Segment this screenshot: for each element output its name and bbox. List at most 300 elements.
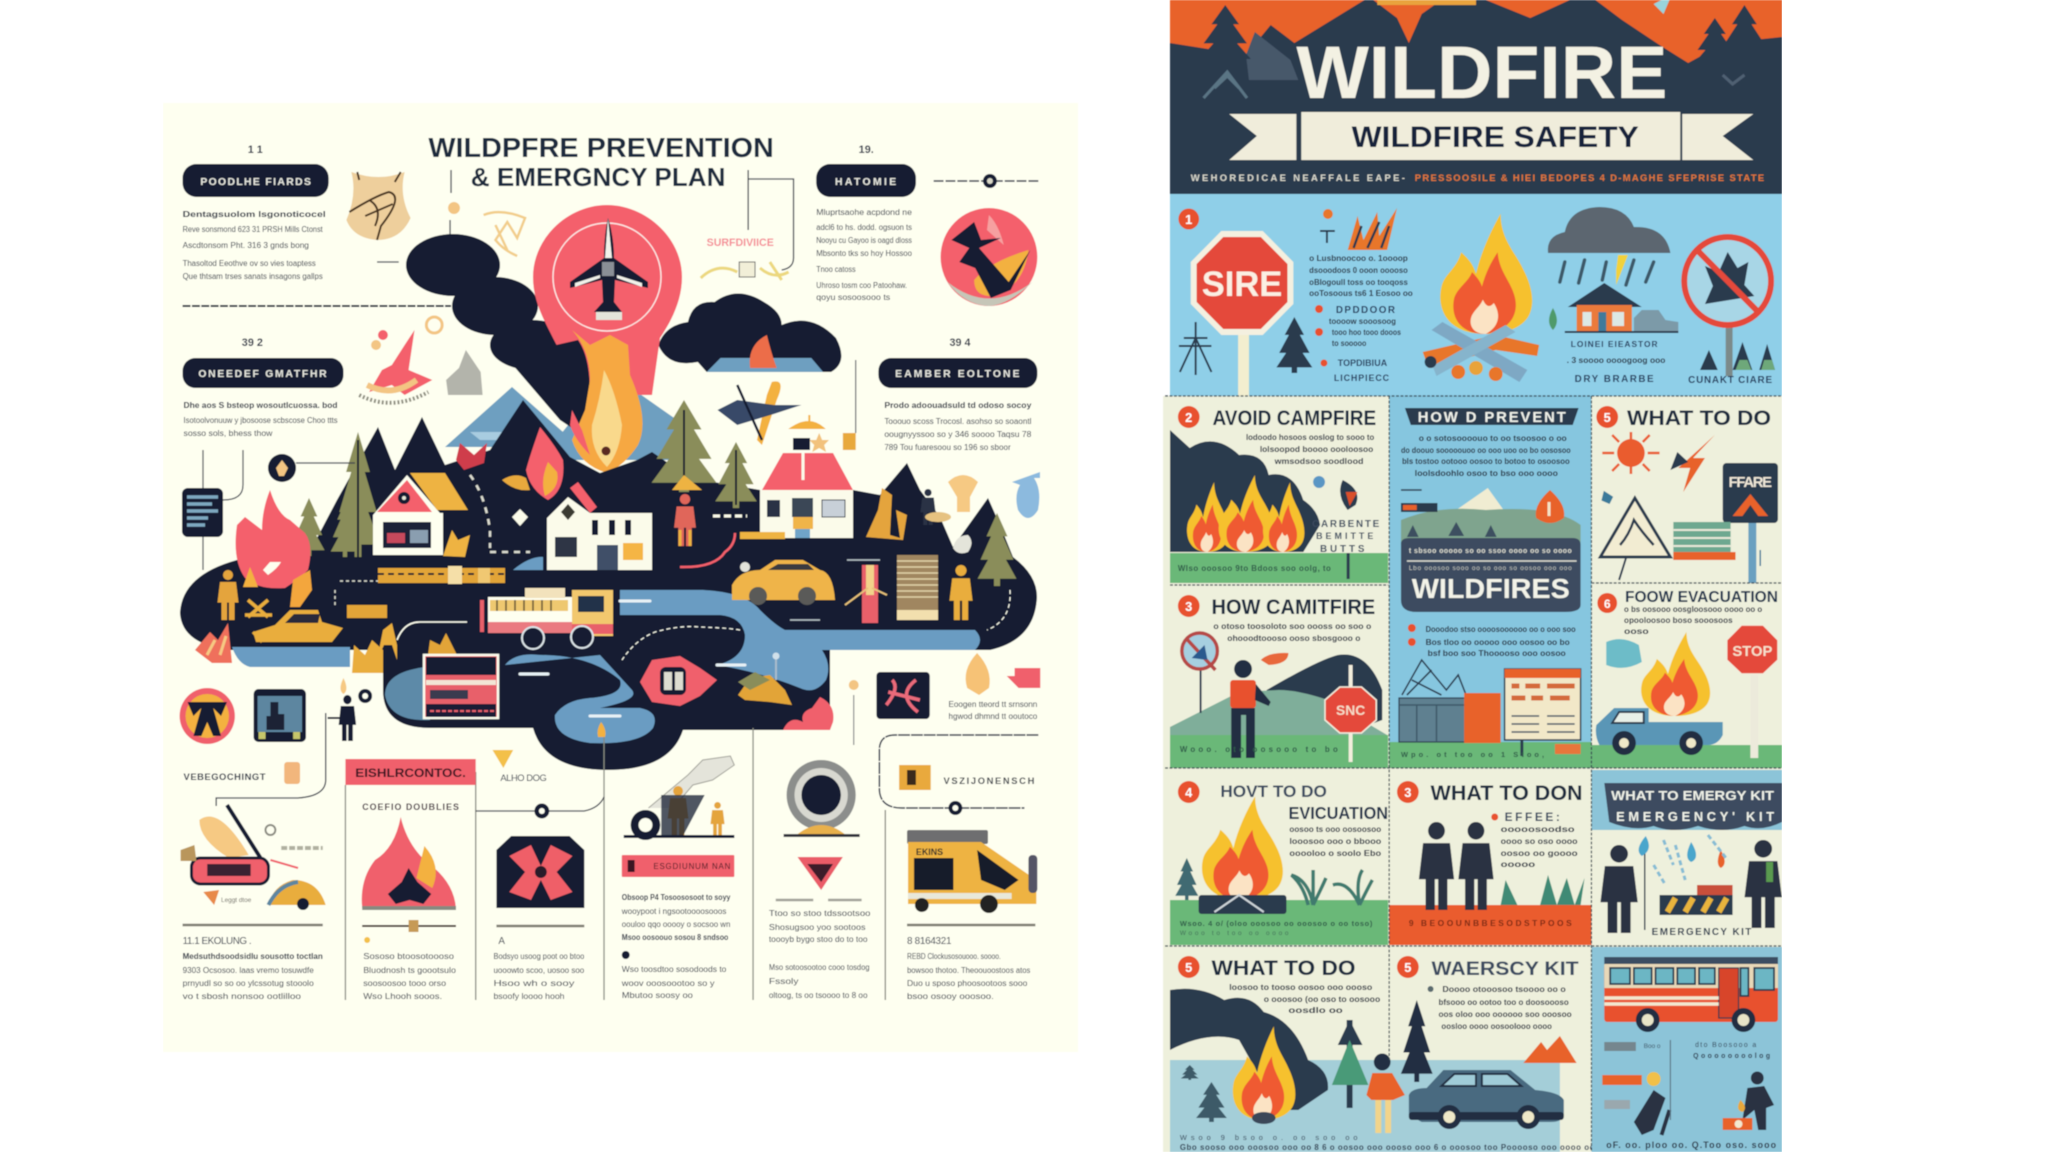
grid dividers	[1165, 396, 1782, 1152]
section number labels: 39 2	[242, 337, 263, 349]
badge	[1596, 406, 1618, 428]
icon: dark smoke plume	[406, 234, 598, 440]
bottom text column 5: Fssoly	[769, 977, 798, 986]
figure pink	[845, 565, 887, 623]
bottom text column 4: Obsoop P4 Tosoososoot to soyy	[622, 893, 731, 902]
text lines: bls tostoo ootooo oosoo to botoo to osoosoo	[1402, 457, 1570, 466]
text block: top right: Mbsonto tks so hoy Hossoo	[816, 249, 913, 258]
lower blue wash	[1170, 1060, 1560, 1152]
text lines: oosoo ts ooo oosoosoo	[1289, 825, 1381, 834]
pill heading: top right	[816, 164, 916, 197]
fire warning sign: FFARE	[1729, 475, 1772, 491]
mountain and hills	[1401, 488, 1581, 545]
caption: BEMITTE	[1316, 531, 1373, 541]
title: WILDPFRE PREVENTION	[428, 132, 774, 163]
text lines	[1501, 825, 1578, 869]
section what to do top right	[1596, 406, 1778, 583]
badge	[1178, 781, 1200, 803]
cream base for lower rows	[1163, 396, 1782, 1152]
icon: dark storm cloud with fire	[658, 294, 841, 372]
dotted white trail	[335, 581, 378, 605]
text lines: loosoo to tooso oosoo ooo oooso	[1229, 983, 1372, 992]
prohibition sign	[1684, 237, 1775, 386]
orange spark	[1261, 653, 1288, 665]
connector with node	[934, 174, 1038, 188]
blue blob	[1606, 639, 1642, 668]
smoke	[1170, 989, 1328, 1110]
people and supplies near right house	[866, 488, 951, 540]
bulleted list 1: toooow sooosoog	[1329, 317, 1396, 326]
label with icon	[184, 762, 300, 784]
barrier kit box	[1660, 885, 1733, 915]
small icons	[1313, 476, 1358, 510]
doc icon and nodes	[182, 450, 355, 570]
power pylon	[1179, 322, 1211, 375]
smoke	[1170, 430, 1320, 552]
text lines	[1246, 433, 1374, 466]
header band	[1170, 0, 1782, 194]
ground text: Wpo. ot too oo 1 Stoo,	[1401, 750, 1544, 759]
text lines: lodoodo hosoos ooslog to sooo to	[1246, 433, 1374, 442]
person with marker	[328, 678, 372, 741]
text lines	[1428, 985, 1572, 1031]
middle blue column background	[1389, 396, 1591, 768]
bottom text: oF. oo. ploo oo. Q.Too oso. sooo	[1606, 1140, 1777, 1150]
icon: explosion debris	[359, 317, 442, 403]
tool icon left	[245, 600, 272, 617]
heading: FOOW EVACUATION	[1625, 589, 1778, 606]
house: red roof right	[740, 438, 853, 539]
text lines: ooso	[1624, 627, 1649, 636]
text block: middle left: Isotoolvonuuw y jbosoose scbscose Choo ttts	[184, 416, 338, 425]
text block 1	[1309, 254, 1413, 298]
striped stack	[1673, 522, 1736, 560]
upper poster content	[183, 132, 1038, 452]
bottom text column 3: A	[498, 936, 505, 947]
flame	[1641, 632, 1710, 716]
text block 1: dsooodoos 0 ooon ooooso	[1309, 266, 1408, 275]
text lines: opooloosoo boso sooosoos	[1624, 616, 1733, 625]
section emergency kit with car	[1180, 956, 1595, 1152]
title: & EMERGNCY PLAN	[471, 164, 725, 192]
text lines: oooo so oso oooo	[1501, 837, 1578, 846]
text lines: ooooloo o soolo Ebo	[1289, 849, 1381, 858]
icon: plane badge and flame trail	[533, 205, 682, 473]
house: white centre house	[543, 478, 655, 570]
text lines: o otoso toosoloto soo oooss oo soo o	[1213, 622, 1372, 631]
text lines: loolsdoohlo osoo to bso ooo oooo	[1415, 469, 1558, 478]
bar and yellow marker	[362, 920, 456, 943]
badge: 5	[1185, 960, 1192, 975]
ground	[1591, 745, 1782, 768]
text lines: bfsooo oo ootoo too o doosoooso	[1438, 998, 1569, 1007]
section fire bus and steps	[1591, 947, 1782, 1152]
text block 1: ooTosoous ts6 1 Eosoo oo	[1309, 289, 1413, 298]
green strip text: Wsoo. 4 o/ (oloo ooosoo oo ooosoo o oo toso)	[1180, 919, 1373, 928]
panel: wildfire prevention and emergency plan poster	[163, 103, 1078, 1052]
bulleted list 1: TOPDIBIUA	[1338, 358, 1388, 368]
text block: middle right: 789 Tou fuaresoou so 196 so sboor	[884, 443, 1011, 452]
fire bus	[1604, 957, 1778, 1032]
wildfires banner	[1401, 538, 1581, 612]
green ground	[1170, 735, 1388, 768]
pill heading: middle left: ONEEDEF GMATFHR	[198, 369, 327, 380]
phone icon	[254, 689, 306, 742]
bottom text column 5	[769, 909, 871, 1000]
bottom text column 6: bowsoo thotoo. Theoouoostoos atos	[907, 966, 1030, 975]
header title: WILDFIRE	[1296, 31, 1667, 114]
bottom caption lines: Wsoo 9 bsoo o. oo soo oo	[1180, 1133, 1358, 1142]
person in orange on the path	[674, 494, 696, 546]
icon: delivery truck: EKINS	[916, 847, 943, 857]
bulleted list 1: to sooooo	[1332, 339, 1367, 348]
dashes across land	[713, 514, 747, 518]
bottom text column 2: Wso Lhooh sooos.	[363, 992, 442, 1001]
icon: red flame	[362, 817, 456, 910]
bulleted list 1	[1315, 305, 1401, 383]
heading	[1220, 782, 1388, 823]
bottom text column 5: Ttoo so stoo tdssootsoo	[769, 909, 871, 918]
heading: WHAT TO DON	[1431, 782, 1583, 805]
yellow figure and crown near stream	[352, 623, 457, 673]
badge: 3	[1185, 599, 1192, 614]
section what to do with two people	[1389, 781, 1591, 945]
bottom text column 5: Mso sotoosootoo cooo tosdog	[769, 963, 870, 972]
icon: burnt tree roundel	[941, 208, 1037, 306]
river highlights	[520, 601, 745, 716]
bottom text column 1: prnyudl so so oo ylcssotug stooolo	[183, 979, 314, 988]
icon: blue mountains	[445, 373, 690, 460]
icon: extinguisher scene: Leggt dtoe	[221, 897, 252, 904]
bottom text column 4: oouloo qqo ooooy o socsoo wn	[622, 920, 730, 929]
right steps: Qoooooooolog	[1693, 1053, 1770, 1060]
section number labels: 19.	[859, 144, 874, 156]
title	[428, 132, 774, 192]
text lines: o bs oosooo oosgloosooo oooo oo o	[1624, 605, 1762, 614]
bottom text column 5: Shosugsoo yoo sootoos	[769, 923, 866, 932]
pickup truck	[1596, 708, 1723, 755]
bottom text column 3: uooowto scoo, uosoo soo	[493, 966, 585, 975]
heading: HOW CAMITFIRE	[1211, 596, 1375, 619]
stop sign: SIRE	[1202, 266, 1282, 304]
bottom text column 4	[621, 893, 731, 1000]
cloud banner: EMERGENCY' KIT	[1616, 809, 1774, 824]
text block: top right	[816, 208, 913, 302]
bottom text column 6: REBD Clockusosouooo. soooo.	[907, 952, 1001, 961]
icon: folded map	[346, 172, 411, 240]
green strip text: Wlso ooosoo 9to Bdoos soo oolg, to	[1178, 564, 1331, 573]
caption	[1312, 519, 1380, 555]
car yellow left	[253, 610, 343, 642]
icon: yellow scribble with book	[701, 262, 789, 280]
red label	[1401, 490, 1437, 512]
pill heading: middle right: EAMBER EOLTONE	[895, 369, 1020, 380]
right steps: dto Boosooo a	[1695, 1042, 1756, 1049]
text block: top right: Mluprtsaohe acpdond ne	[816, 208, 913, 217]
text lines	[1624, 605, 1762, 636]
text lines: wmsodsoo soodlood	[1274, 457, 1364, 466]
pink flame in land corner	[783, 697, 833, 730]
text block: middle right: Prodo adoouadsuld td odoso socoy	[884, 401, 1032, 410]
section follow evacuation	[1591, 589, 1782, 768]
bottom text column 1: vo t sbosh nonsoo ootlilloo	[183, 992, 302, 1001]
icon: dark octagon with red cross	[496, 836, 584, 908]
bottom text column 2: soosoosoo tooo orso	[363, 979, 447, 988]
bottom text column 3	[493, 936, 585, 1001]
text block: top left: Thasoltod Eeothve ov so vies toaptess	[183, 259, 316, 268]
bullets: Bos tloo oo ooooo ooo oosoo oo bo	[1426, 638, 1570, 647]
text block: top right: Tnoo catoss	[816, 265, 856, 274]
badge: 2	[1185, 410, 1192, 425]
text lines	[1289, 825, 1381, 858]
section 3 how campfire	[1170, 595, 1388, 768]
badge: 5	[1604, 410, 1611, 425]
signpost	[1347, 553, 1350, 579]
house with car	[1549, 283, 1678, 332]
ribbon banner: WILDFIRE SAFETY	[1352, 121, 1639, 154]
wildfires banner: Lbo ooosoo sooo oo so ooo so oosoo ooo ooo	[1409, 565, 1572, 572]
caption right: Eoogen tteord tt srnsonn	[948, 700, 1037, 709]
bottom text column 3: bsoofy loooo hooh	[493, 992, 565, 1001]
bottom text column 5: toooyb bygo stoo do to too	[769, 935, 868, 944]
icon: extinguisher scene	[181, 805, 326, 910]
caption: EMERGENCY KIT	[1652, 927, 1751, 938]
cloud banner	[1604, 783, 1782, 830]
icon: dark square with pink	[876, 672, 930, 719]
fire warning sign	[1723, 463, 1778, 583]
warning roundel	[180, 688, 235, 744]
yellow figure and palm	[738, 652, 792, 705]
blue background	[1591, 947, 1782, 1152]
red label 2	[622, 855, 734, 877]
text block: middle left: sosso sols, bhess thow	[184, 429, 273, 438]
text block: top left: Ascdtonsom Pht. 316 3 gnds bong	[183, 241, 309, 250]
bottom text column 4: Wso toosdtoo sosodoods to	[622, 965, 727, 974]
column dividers	[345, 728, 885, 1000]
three flames	[1187, 475, 1304, 552]
bottom text column 2	[363, 952, 457, 1001]
building strip	[378, 566, 505, 584]
text lines	[1213, 622, 1372, 643]
header trees	[1200, 5, 1768, 98]
section what to do bottom left	[1170, 956, 1560, 1152]
icon: delivery truck	[907, 830, 1037, 913]
people	[1600, 838, 1782, 933]
bulleted list 1: tooo hoo tooo dooos	[1332, 328, 1401, 337]
section number labels	[242, 144, 971, 349]
text lines: oos oloo ooo oooooo soo ooosoo	[1438, 1010, 1572, 1019]
text block: top left: Dentagsuolom lsgonoticocel	[183, 210, 326, 219]
river channel	[620, 590, 980, 690]
trees	[293, 400, 1016, 586]
pink curve	[680, 533, 735, 567]
river pool	[505, 654, 655, 743]
pill heading: top left	[183, 164, 329, 197]
subheading: COEFIO DOUBLIES	[362, 802, 459, 812]
text block: top right: Nooyu cu Gayoo is oagd dloss	[816, 236, 912, 245]
connector with orange box	[809, 360, 856, 452]
card icon inside land	[424, 655, 498, 718]
bottom text column 1: Medsuthdsoodsidlu sousotto toctlan	[183, 952, 323, 961]
flame	[1233, 1026, 1295, 1124]
bottom text column 5: oltoog, ts oo tsoooo to 8 oo	[769, 991, 868, 1000]
blue stream strip left	[232, 647, 350, 667]
text lines: oosdlo oo	[1288, 1006, 1343, 1015]
stop sign	[1727, 625, 1778, 758]
text lines: oosoo oo goooo	[1501, 849, 1578, 858]
text lines: lolsoopod boooo oooloosoo	[1260, 445, 1373, 454]
two people	[1419, 822, 1494, 910]
caption right: hgwod dhmnd tt ooutoco	[948, 712, 1038, 721]
green ground	[1170, 553, 1388, 583]
text lines: o o sotosoooouo to oo tsoosoo o oo	[1419, 434, 1567, 443]
thin white marks	[790, 560, 880, 620]
left steps with labels: Boo o	[1644, 1043, 1661, 1050]
small blue marks	[1602, 492, 1760, 566]
text block: middle right	[884, 401, 1032, 452]
badge	[1397, 781, 1419, 803]
stop sign	[1191, 231, 1293, 396]
heading: AVOID CAMPFIRE	[1212, 407, 1376, 430]
icon: flames near the ridge	[456, 427, 563, 500]
text block: top right: qoyu sosoosooo ts	[816, 293, 890, 302]
text block 1: o Lusbnoocoo o. 1oooop	[1309, 254, 1408, 263]
sub label: EFFEE:	[1505, 810, 1560, 824]
stop sign small	[1325, 665, 1376, 762]
yellow marker stem	[849, 680, 859, 745]
section number labels: 39 4	[949, 337, 971, 349]
sun	[1602, 432, 1660, 474]
tree	[1332, 1020, 1368, 1108]
fire truck	[480, 588, 613, 649]
section 1 causes panel	[1170, 194, 1782, 396]
badge	[1597, 593, 1617, 613]
dark forest and land silhouette	[180, 400, 1037, 770]
river side pool	[385, 667, 430, 720]
icon: gauge badge	[784, 760, 860, 837]
diamond and dashes	[470, 475, 530, 552]
text lines	[1229, 983, 1380, 1015]
text lines: o ooosoo (oo oso to oosooo	[1264, 995, 1380, 1004]
bottom text column 4: wooypoot i ngsootoooosooos	[621, 907, 726, 916]
panel: wildfire safety poster	[1163, 0, 1782, 1152]
icon: machine with worker	[624, 756, 734, 840]
orange strip text: 9 BEOOUNBBESODSTPOOS	[1409, 918, 1572, 928]
figure yellow left	[218, 570, 238, 620]
buildings and billboard	[1399, 660, 1581, 756]
section emergency kit	[1591, 770, 1782, 938]
icon: red mug	[1007, 668, 1040, 688]
connector curve	[216, 713, 326, 806]
green strip text	[1180, 919, 1373, 937]
icon: yellow vest	[948, 475, 978, 512]
hill green	[1170, 690, 1387, 768]
bottom caption lines: Gbo sooso ooo ooosoo ooo oo 8 6 o oosoo ooo oooso ooo 6 o ooosoo too Pooooso ooo oooo oo	[1180, 1143, 1595, 1152]
yellow marker drop	[598, 722, 606, 737]
icon: shield triangle	[797, 857, 843, 890]
bottom text column 6: bsoo osooy ooosoo.	[907, 992, 994, 1001]
header strapline	[1191, 172, 1764, 183]
stop sign small: SNC	[1336, 702, 1365, 718]
text block: top left: Que thtsam trses sanats insagons gallps	[183, 272, 323, 281]
car yellow right	[732, 560, 835, 605]
stop sign: STOP	[1732, 644, 1772, 660]
bottom text column 4: woov ooosoootoo so y	[621, 979, 715, 988]
plants	[1175, 858, 1372, 905]
text block: top left: Reve sonsmond 623 31 PRSH Mills Ctonst	[183, 225, 323, 234]
connector with node middle	[476, 797, 604, 818]
campfire flame and logs	[1423, 214, 1539, 382]
header strapline: WEHOREDICAE NEAFFALE EAPE-	[1191, 172, 1405, 183]
wildfires banner: WILDFIRES	[1412, 573, 1570, 604]
bullets: bsf boo soo Thooooso ooo oosoo	[1428, 649, 1566, 658]
bottom text column 2: Sososo btoosotoooso	[363, 952, 455, 961]
bulleted list 1: LICHPIECC	[1334, 373, 1390, 383]
text lines: looosoo ooo o bbooo	[1289, 837, 1381, 846]
icon: yellow spark scribble	[484, 212, 525, 256]
text block: middle right: oougnyyssoo so y 346 soooo Taqsu 78	[884, 430, 1032, 439]
section 2 avoid campfire	[1170, 406, 1388, 583]
warning triangle	[1600, 498, 1670, 580]
bottom text column 6: 8 8164321	[907, 936, 952, 947]
left steps with labels	[1602, 1042, 1669, 1135]
caption: CARBENTE	[1312, 519, 1380, 530]
caption block	[1567, 339, 1666, 385]
icon: large pink fire on the left	[236, 490, 312, 607]
heading: WHAT TO DO	[1211, 957, 1356, 980]
badge	[1178, 406, 1200, 428]
person	[1230, 660, 1271, 758]
icon: small plane and tools	[718, 381, 823, 445]
icon: blue jar	[1012, 472, 1040, 518]
flame and log	[1199, 796, 1286, 914]
ribbon banner	[1229, 112, 1753, 160]
person	[1366, 1054, 1405, 1133]
rules above bottom text	[183, 925, 1035, 926]
bottom caption lines	[1180, 1133, 1595, 1152]
caption: BUTTS	[1320, 544, 1365, 555]
cloud banner: WHAT TO EMERGY KIT	[1611, 788, 1774, 803]
storm cloud with rain	[1548, 207, 1670, 285]
connector lines top	[377, 170, 794, 270]
red header label: EISHLRCONTOC.	[355, 768, 466, 780]
ground text: Wooo. oto oosooo to bo	[1180, 745, 1338, 754]
text block: middle left	[184, 401, 338, 438]
icon: grey rock splash	[446, 350, 483, 395]
bottom text column 6: Duo u sposo phoosootoos sooo	[907, 979, 1028, 988]
tree	[1276, 317, 1312, 373]
bottom text column 1: 11.1 EKOLUNG .	[183, 936, 252, 947]
no-fire sign	[1182, 633, 1217, 713]
label with icon: VEBEGOCHINGT	[184, 771, 266, 782]
right steps	[1693, 1042, 1774, 1130]
prohibition sign: CUNAKT CIARE	[1688, 375, 1772, 386]
dashed curve top right	[879, 735, 1038, 808]
text lines: Doooo otooosoo tsoooo oo o	[1442, 985, 1566, 994]
heading: EVICUATION	[1288, 803, 1388, 823]
red header label	[345, 759, 476, 785]
round red emblem	[640, 656, 717, 706]
header strapline: PRESSOOSILE & HIEI BEDOPES 4 D-MAGHE SFEPRISE STATE	[1415, 172, 1764, 183]
house: yellow roof with red gable	[373, 473, 470, 557]
pill heading: top left: POODLHE FIARDS	[200, 177, 311, 188]
section number labels: 1 1	[248, 144, 263, 156]
caption block: . 3 soooo oooogoog ooo	[1567, 356, 1666, 365]
divider	[1669, 1040, 1671, 1120]
hill dark	[1259, 654, 1382, 740]
section how to do evacuation	[1170, 781, 1388, 945]
lower poster content	[180, 653, 1040, 1001]
